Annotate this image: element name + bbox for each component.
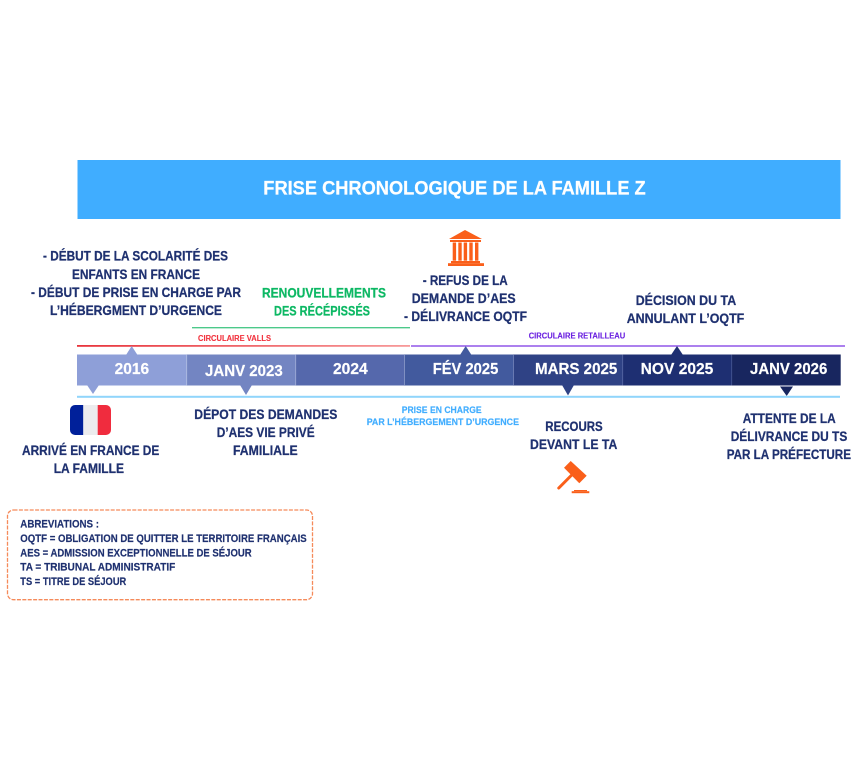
panel: abréviations: TS = TITRE DE SÉJOUR <box>20 575 126 588</box>
text: attente du TS: ATTENTE DE LA <box>743 411 836 426</box>
line: circulaire Valls period <box>77 345 410 347</box>
label: circulaire Valls: CIRCULAIRE VALLS <box>198 333 271 343</box>
text: prise en charge hébergement: PAR L’HÉBERGEMENT D’URGENCE <box>367 417 519 427</box>
segment: mars 2025 <box>514 354 623 396</box>
text: renouvellements: DES RÉCÉPISSÉS <box>274 304 370 319</box>
segment: 2024 <box>296 354 404 386</box>
segment: nov 2025 <box>623 346 732 386</box>
segment: 2016: 2016 <box>115 361 150 378</box>
segment: 2016 <box>77 346 187 394</box>
text: attente du TS: DÉLIVRANCE DU TS <box>731 429 847 444</box>
text: dépôt des demandes <box>194 407 337 458</box>
segment: mars 2025: MARS 2025 <box>535 361 618 378</box>
icon: courthouse <box>448 230 484 266</box>
segment: janv 2026 <box>732 354 841 396</box>
text: 2016 events above: - DÉBUT DE LA SCOLARITÉ DES <box>43 249 228 264</box>
line: circulaire Retailleau period <box>411 345 845 347</box>
segment: fév 2025: FÉV 2025 <box>433 361 499 378</box>
segment: janv 2023: JANV 2023 <box>205 363 283 380</box>
segment: nov 2025: NOV 2025 <box>641 361 714 378</box>
icon: French flag <box>70 405 111 435</box>
text: attente du TS <box>727 411 851 462</box>
text: refus AES and OQTF: DEMANDE D’AES <box>412 291 516 306</box>
title banner <box>78 160 840 219</box>
segment: janv 2023 <box>187 354 296 395</box>
text: 2016 events above: L’HÉBERGMENT D’URGENCE <box>50 303 222 318</box>
line: renouvellements period <box>192 327 410 329</box>
text: décision du TA: DÉCISION DU TA <box>636 293 736 308</box>
text: 2016 events above: - DÉBUT DE PRISE EN CHARGE PAR <box>31 285 241 300</box>
text: arrivée en France: LA FAMILLE <box>54 461 124 476</box>
text: recours: RECOURS <box>545 419 603 434</box>
timeline bar <box>77 346 841 396</box>
text: dépôt des demandes: DÉPOT DES DEMANDES <box>194 407 337 422</box>
panel: abréviations: OQTF = OBLIGATION DE QUITTER LE TERRITOIRE FRANÇAIS <box>20 533 307 545</box>
text: décision du TA <box>627 293 744 326</box>
text: prise en charge hébergement <box>367 405 519 427</box>
segment: janv 2026: JANV 2026 <box>750 361 828 378</box>
text: 2016 events above: ENFANTS EN FRANCE <box>72 267 200 282</box>
text: refus AES and OQTF: - REFUS DE LA <box>423 273 508 288</box>
label: circulaire Retailleau: CIRCULAIRE RETAILLEAU <box>529 331 625 341</box>
text: renouvellements: RENOUVELLEMENTS <box>262 286 386 301</box>
segment: 2024: 2024 <box>333 361 368 378</box>
text: refus AES and OQTF <box>404 273 527 324</box>
panel: abréviations: ABREVIATIONS : <box>20 519 99 531</box>
text: dépôt des demandes: D’AES VIE PRIVÉ <box>217 425 315 440</box>
line: prise en charge period <box>77 396 840 398</box>
panel: abréviations <box>8 510 312 600</box>
text: décision du TA: ANNULANT L’OQTF <box>627 311 744 326</box>
text: 2016 events above <box>31 249 241 318</box>
icon: gavel <box>559 461 589 493</box>
panel: abréviations: TA = TRIBUNAL ADMINISTRATIF <box>20 562 176 574</box>
text: recours <box>530 419 618 452</box>
text: arrivée en France: ARRIVÉ EN FRANCE DE <box>22 443 159 458</box>
text: refus AES and OQTF: - DÉLIVRANCE OQTF <box>404 309 527 324</box>
title banner: FRISE CHRONOLOGIQUE DE LA FAMILLE Z <box>263 178 646 200</box>
segment: fév 2025 <box>404 346 514 386</box>
panel: abréviations: AES = ADMISSION EXCEPTIONNELLE DE SÉJOUR <box>20 547 252 560</box>
text: arrivée en France <box>22 443 159 476</box>
text: recours: DEVANT LE TA <box>530 437 618 452</box>
text: prise en charge hébergement: PRISE EN CHARGE <box>402 405 482 415</box>
text: dépôt des demandes: FAMILIALE <box>233 443 298 458</box>
text: renouvellements <box>262 286 386 319</box>
